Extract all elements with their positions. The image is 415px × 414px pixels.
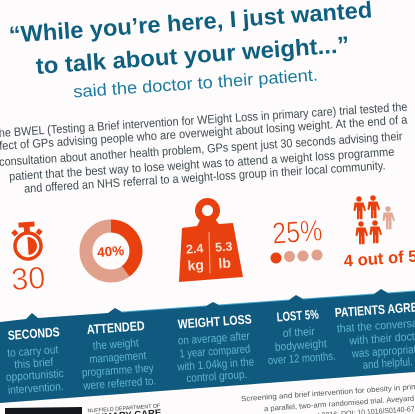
title: to talk about your weight...” bbox=[35, 31, 350, 79]
column: weight loss: 1 year compared bbox=[179, 344, 251, 360]
column: seconds: this brief bbox=[14, 357, 54, 371]
column: lost 5% bbox=[267, 307, 336, 367]
citation bbox=[241, 380, 415, 414]
stat: 25%: 25% bbox=[271, 214, 323, 251]
icon: stopwatch bbox=[11, 221, 44, 260]
column: lost 5%: over 12 months. bbox=[267, 351, 336, 367]
column: seconds bbox=[5, 324, 64, 397]
icon: weight: 2.4 bbox=[186, 241, 204, 257]
column: weight loss: with 1.04kg in the bbox=[176, 356, 255, 374]
icon: people 4 of 5 bbox=[354, 195, 395, 244]
chart: donut 40% bbox=[86, 226, 136, 276]
chart: donut 40%: 40% bbox=[97, 243, 125, 260]
icon: weight bbox=[179, 202, 243, 282]
column: weight loss: on average after bbox=[177, 331, 250, 348]
column: lost 5%: of their bbox=[282, 326, 315, 340]
subtitle: said the doctor to their patient. bbox=[73, 65, 318, 102]
icon: weight: kg bbox=[187, 256, 204, 274]
column: weight loss: WEIGHT LOSS bbox=[177, 311, 252, 332]
stat: 30: 30 bbox=[10, 260, 46, 297]
column: attended: were referred to. bbox=[82, 375, 157, 393]
stat: 25% bbox=[270, 214, 323, 264]
column: weight loss: control group. bbox=[186, 369, 248, 385]
column: patients agree bbox=[334, 299, 415, 372]
column: seconds: to carry out bbox=[7, 344, 59, 360]
column: lost 5%: LOST 5% bbox=[276, 307, 319, 324]
column: attended: the weight bbox=[92, 337, 140, 353]
intro text block: and offered an NHS referral to a weight-loss group in their local community. bbox=[24, 158, 386, 196]
logo: university crest block bbox=[5, 407, 82, 414]
column: attended: ATTENDED bbox=[86, 318, 145, 337]
column: attended bbox=[81, 318, 157, 393]
column: seconds: SECONDS bbox=[7, 324, 60, 343]
title bbox=[8, 0, 373, 79]
column: seconds: intervention. bbox=[7, 381, 64, 397]
column: seconds: opportunistic bbox=[5, 368, 64, 384]
intro text block bbox=[0, 100, 408, 196]
column: attended: management bbox=[89, 350, 147, 366]
column: weight loss bbox=[176, 311, 255, 385]
panel: results band bbox=[0, 289, 415, 403]
column: attended: programme they bbox=[81, 362, 154, 380]
column: lost 5%: bodyweight bbox=[274, 338, 328, 354]
icon: weight: 5.3 bbox=[215, 239, 233, 255]
icon: weight: lb bbox=[218, 255, 231, 271]
